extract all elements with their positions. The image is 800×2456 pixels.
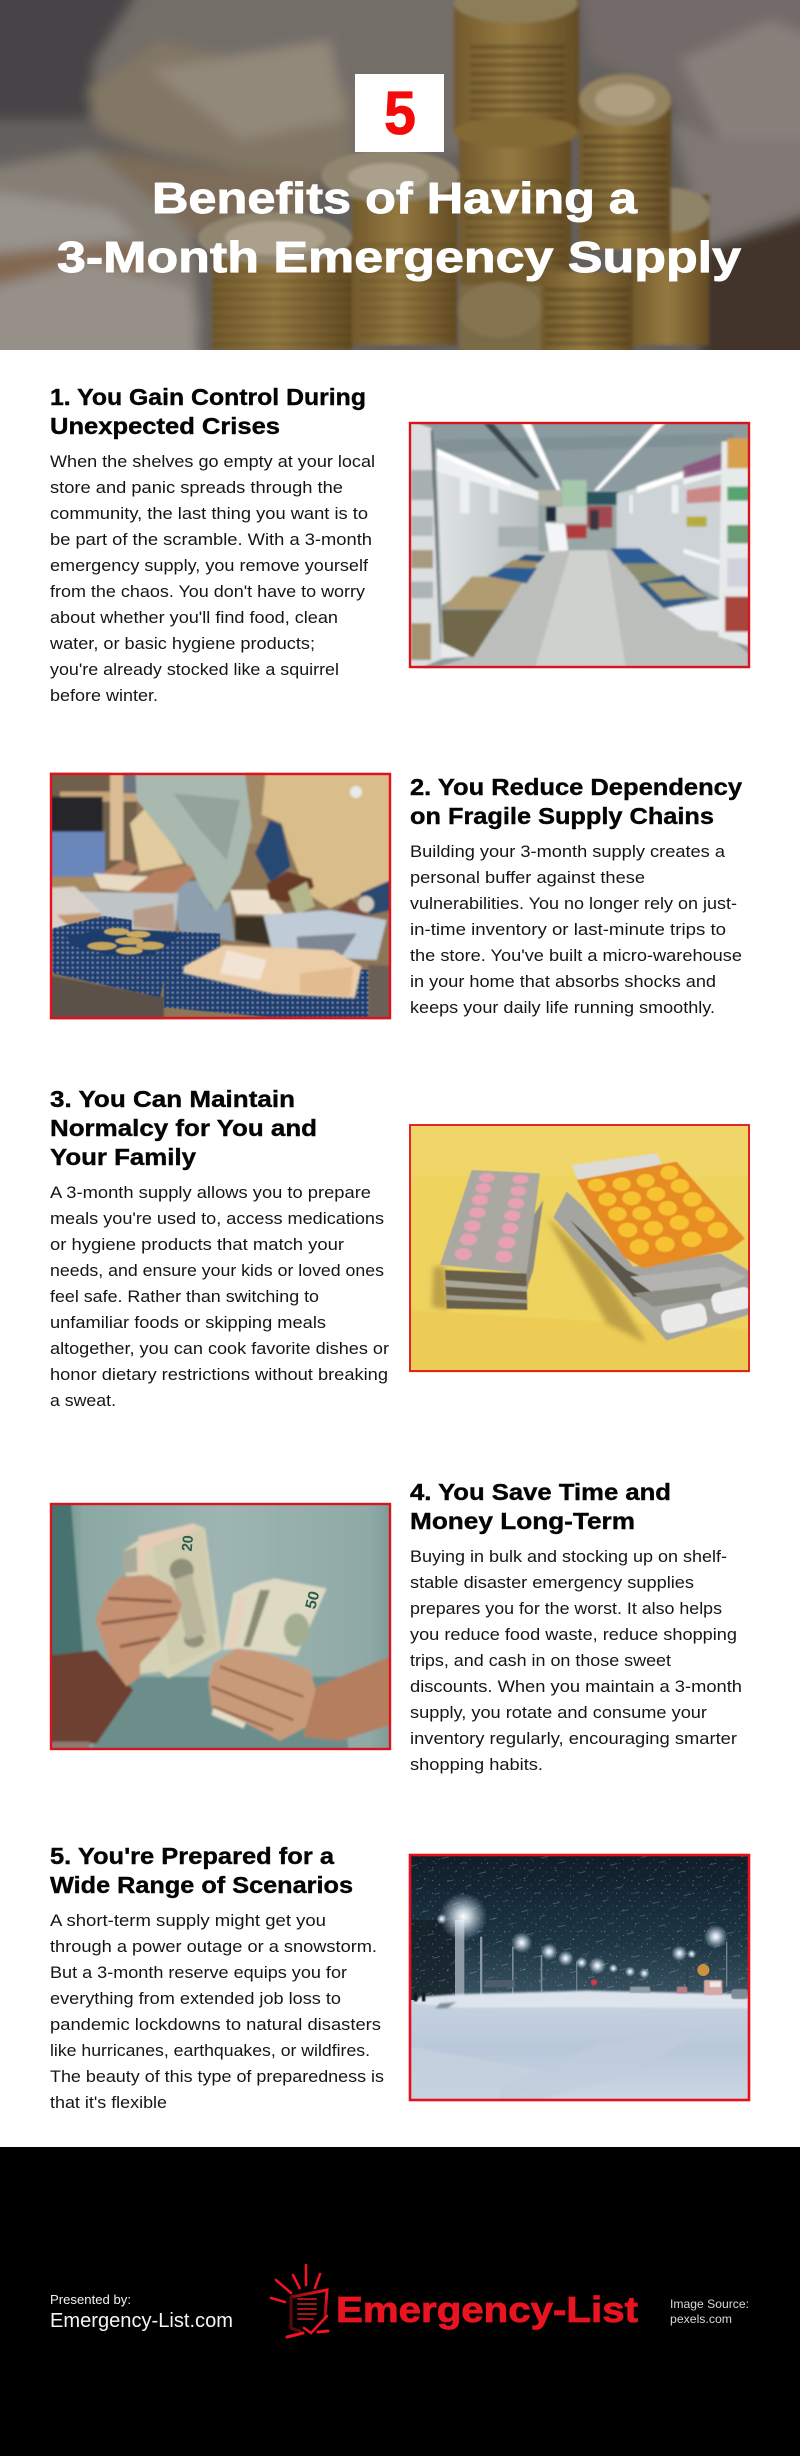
photo 5: snowstorm at night <box>409 1855 750 2101</box>
heading 1 <box>50 384 366 439</box>
bottom bills and right hand <box>210 1707 247 1730</box>
body 1 <box>49 453 375 705</box>
presented by: Presented by: <box>50 2293 131 2307</box>
heading 2: 2. You Reduce Dependency <box>410 774 742 800</box>
left hand <box>95 1575 182 1687</box>
heading 2: on Fragile Supply Chains <box>410 803 714 829</box>
scarf <box>135 760 252 912</box>
left wall <box>437 467 538 605</box>
heading 3: 3. You Can Maintain <box>50 1086 295 1112</box>
body 3 <box>50 1184 390 1410</box>
body 5: like hurricanes, earthquakes, or wildfires. <box>50 2042 370 2060</box>
body 5: everything from extended job loss to <box>50 1990 341 2008</box>
body 2 <box>410 843 742 1017</box>
presented by: Emergency-List.com <box>50 2310 233 2332</box>
body 3: A 3-month supply allows you to prepare <box>50 1184 371 1202</box>
heading 5 <box>50 1843 353 1898</box>
floor <box>433 550 750 668</box>
title: Benefits of Having a <box>152 174 638 223</box>
section 1 text <box>49 384 375 705</box>
body 1: be part of the scramble. With a 3-month <box>50 531 372 549</box>
body 4: stable disaster emergency supplies <box>410 1574 694 1592</box>
image source: pexels.com <box>670 2312 732 2326</box>
number badge <box>355 74 444 152</box>
shadows <box>432 1267 448 1310</box>
body 4 <box>410 1548 742 1774</box>
arms and bread <box>103 860 140 877</box>
body 1: you're already stocked like a squirrel <box>50 661 339 679</box>
wordmark: Emergency-List <box>336 2289 638 2330</box>
body 4: shopping habits. <box>410 1756 543 1774</box>
table and crates background <box>230 890 285 915</box>
clear boxes <box>78 892 178 932</box>
title: 3-Month Emergency Supply <box>57 233 742 282</box>
section 4 text <box>410 1479 742 1774</box>
right wall <box>617 467 723 598</box>
image source <box>670 2297 749 2326</box>
heading 4 <box>410 1479 671 1534</box>
body 3: feel safe. Rather than switching to <box>50 1288 319 1306</box>
heading 5: 5. You're Prepared for a <box>50 1843 335 1869</box>
vehicles <box>414 1980 748 2001</box>
body 2: vulnerabilities. You no longer rely on just- <box>410 895 737 913</box>
body 1: before winter. <box>50 687 158 705</box>
body 4: supply, you rotate and consume your <box>410 1704 708 1722</box>
heading 2 <box>410 774 742 829</box>
section 5 text <box>50 1843 384 2112</box>
number badge: 5 <box>384 79 416 147</box>
hero header <box>0 0 800 380</box>
body 3: meals you're used to, access medications <box>50 1210 384 1228</box>
body 1: emergency supply, you remove yourself <box>50 557 368 575</box>
body 2: keeps your daily life running smoothly. <box>410 999 715 1017</box>
logo <box>271 2265 638 2337</box>
heading 3: Your Family <box>50 1144 196 1170</box>
body 5: The beauty of this type of preparedness is <box>50 2068 384 2086</box>
body 1: from the chaos. You don't have to worry <box>50 583 366 601</box>
bill numerals <box>180 1535 324 1611</box>
heading 5: Wide Range of Scenarios <box>50 1872 353 1898</box>
crate left <box>53 916 220 997</box>
table top <box>50 975 165 1020</box>
presented by <box>50 2293 233 2332</box>
hero photo: canned food and bags <box>0 0 800 380</box>
body 5 <box>50 1912 384 2112</box>
photo 2: volunteers packing food crates <box>50 772 392 1020</box>
heading 3: Normalcy for You and <box>50 1115 317 1141</box>
body 3: unfamiliar foods or skipping meals <box>50 1314 326 1332</box>
heading 3 <box>50 1086 317 1170</box>
body 2: in your home that absorbs shocks and <box>410 973 716 991</box>
body 1: community, the last thing you want is to <box>50 505 368 523</box>
heading 1: 1. You Gain Control During <box>50 384 366 410</box>
photo 3: blister packs of pills <box>409 1124 750 1372</box>
icon: checklist with rays <box>271 2265 328 2337</box>
man <box>260 772 391 910</box>
right shelf unit <box>718 440 748 648</box>
body 5: through a power outage or a snowstorm. <box>50 1938 377 1956</box>
body 1: about whether you'll find food, clean <box>50 609 338 627</box>
cans <box>212 238 352 350</box>
bill numerals: 50 <box>302 1589 324 1611</box>
heading 1: Unexpected Crises <box>50 413 280 439</box>
title <box>57 174 742 282</box>
body 4: you reduce food waste, reduce shopping <box>410 1626 737 1644</box>
left bills <box>123 1523 222 1678</box>
body 3: needs, and ensure your kids or loved ones <box>50 1262 384 1280</box>
body 3: honor dietary restrictions without breaking <box>50 1366 388 1384</box>
distant lights and poles <box>436 1893 728 2002</box>
body 4: Buying in bulk and stocking up on shelf- <box>410 1548 727 1566</box>
body 4: prepares you for the worst. It also helps <box>410 1600 722 1618</box>
back of store <box>538 490 618 553</box>
bill numerals: 20 <box>180 1535 197 1552</box>
body 1: water, or basic hygiene products; <box>49 635 315 653</box>
heading 4: 4. You Save Time and <box>410 1479 671 1505</box>
body 2: personal buffer against these <box>410 869 645 887</box>
woman's body <box>130 803 183 872</box>
heading 4: Money Long-Term <box>410 1508 635 1534</box>
body 2: in-time inventory or last-minute trips to <box>410 921 726 939</box>
body 5: that it's flexible <box>50 2094 167 2112</box>
body 3: a sweat. <box>50 1392 116 1410</box>
body 1: When the shelves go empty at your local <box>50 453 375 471</box>
photo 1: empty supermarket aisle <box>408 422 750 668</box>
photo 4: hands holding dollar bills <box>50 1502 392 1750</box>
section 2 text <box>410 774 742 1017</box>
body 3: or hygiene products that match your <box>50 1236 345 1254</box>
left uprights <box>409 424 444 668</box>
right bills <box>223 1578 327 1656</box>
ceiling lights <box>520 420 561 490</box>
body 5: pandemic lockdowns to natural disasters <box>50 2016 381 2034</box>
notice board <box>545 523 568 552</box>
left stack <box>445 1270 527 1310</box>
body 3: altogether, you can cook favorite dishes or <box>50 1340 390 1358</box>
image source: Image Source: <box>670 2297 749 2311</box>
snow ground <box>409 2000 750 2101</box>
body 4: trips, and cash in on those sweet <box>410 1652 671 1670</box>
body 5: A short-term supply might get you <box>50 1912 326 1930</box>
crate right <box>164 957 368 1017</box>
left pallets <box>442 610 503 657</box>
right pallets <box>610 548 660 565</box>
body 4: discounts. When you maintain a 3-month <box>410 1678 742 1696</box>
right stack <box>553 1192 753 1341</box>
footer <box>0 2147 800 2456</box>
section 3 text <box>50 1086 390 1410</box>
body 1: store and panic spreads through the <box>50 479 343 497</box>
body 5: But a 3-month reserve equips you for <box>50 1964 348 1982</box>
body 4: inventory regularly, encouraging smarter <box>410 1730 738 1748</box>
body 2: Building your 3-month supply creates a <box>410 843 726 861</box>
body 2: the store. You've built a micro-warehouse <box>410 947 742 965</box>
